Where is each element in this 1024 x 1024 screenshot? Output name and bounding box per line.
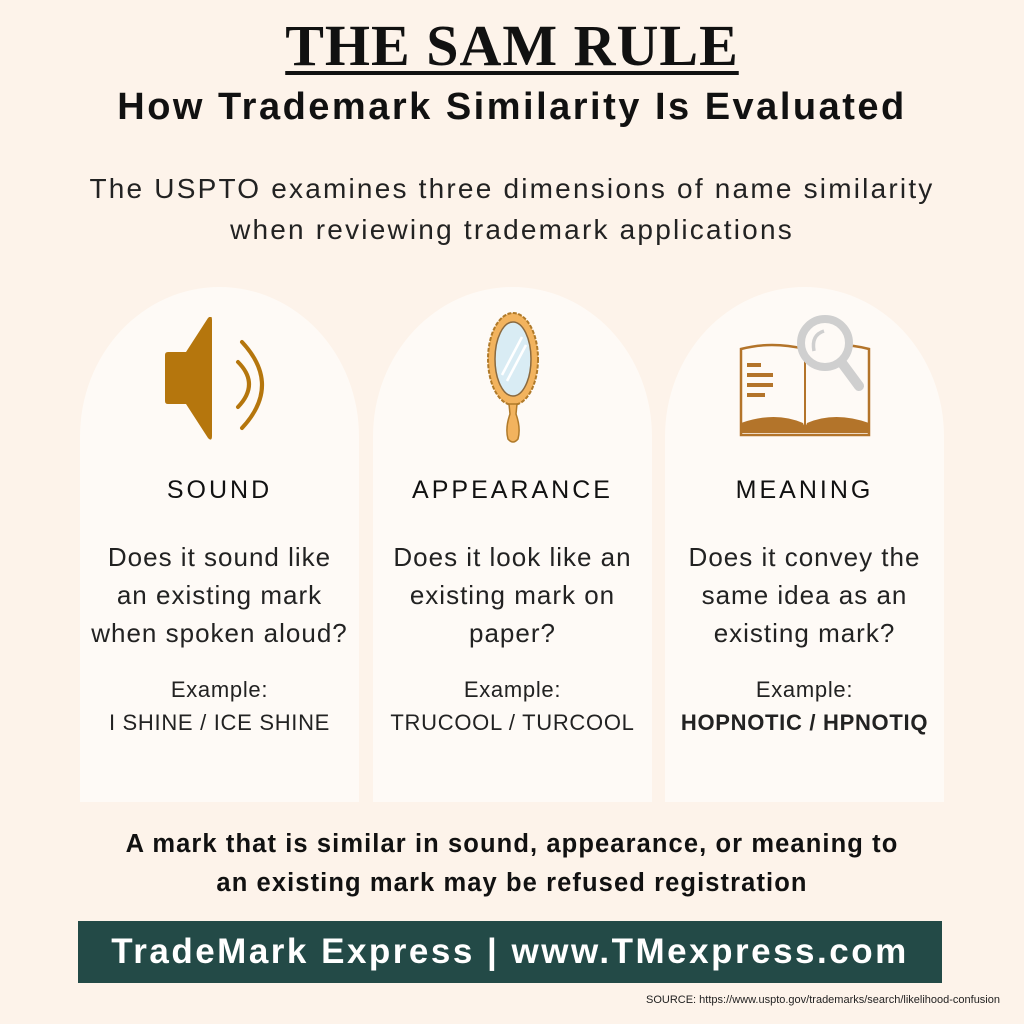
question: when spoken aloud? xyxy=(91,618,348,648)
footer bar xyxy=(78,921,942,983)
example: TRUCOOL / TURCOOL xyxy=(390,710,635,735)
intro text: when reviewing trademark applications xyxy=(230,214,794,245)
example xyxy=(109,677,330,735)
footer bar: TradeMark Express | www.TMexpress.com xyxy=(111,932,909,971)
question: same idea as an xyxy=(702,580,907,610)
question xyxy=(91,542,348,648)
example: Example: xyxy=(464,677,561,702)
panel: appearance xyxy=(373,287,652,802)
icon: book with magnifier xyxy=(740,315,870,436)
question: Does it look like an xyxy=(393,542,632,572)
panel: meaning xyxy=(665,287,944,802)
conclusion text: an existing mark may be refused registration xyxy=(216,869,808,897)
conclusion text xyxy=(126,830,898,897)
question xyxy=(393,542,632,648)
example: I SHINE / ICE SHINE xyxy=(109,710,330,735)
subtitle: How Trademark Similarity Is Evaluated xyxy=(117,86,907,128)
panel: sound xyxy=(80,287,359,802)
question: Does it convey the xyxy=(689,542,920,572)
question: existing mark? xyxy=(714,618,895,648)
example: HOPNOTIC / HPNOTIQ xyxy=(681,710,928,735)
heading: appearance: APPEARANCE xyxy=(412,476,613,504)
icon: mirror xyxy=(487,312,539,443)
conclusion text: A mark that is similar in sound, appearance, or meaning to xyxy=(126,830,898,858)
question: existing mark on xyxy=(410,580,615,610)
example xyxy=(681,677,928,735)
heading: sound: SOUND xyxy=(167,476,272,504)
heading: meaning: MEANING xyxy=(736,476,873,504)
question: Does it sound like xyxy=(108,542,331,572)
source: SOURCE: https://www.uspto.gov/trademarks/search/likelihood-confusion xyxy=(646,994,1000,1006)
intro text: The USPTO examines three dimensions of name similarity xyxy=(89,173,934,204)
question xyxy=(689,542,920,648)
example: Example: xyxy=(756,677,853,702)
question: paper? xyxy=(469,618,556,648)
intro text xyxy=(89,173,934,245)
title: THE SAM RULE xyxy=(285,13,739,78)
question: an existing mark xyxy=(117,580,322,610)
example: Example: xyxy=(171,677,268,702)
icon: speaker xyxy=(165,317,264,440)
example xyxy=(390,677,635,735)
